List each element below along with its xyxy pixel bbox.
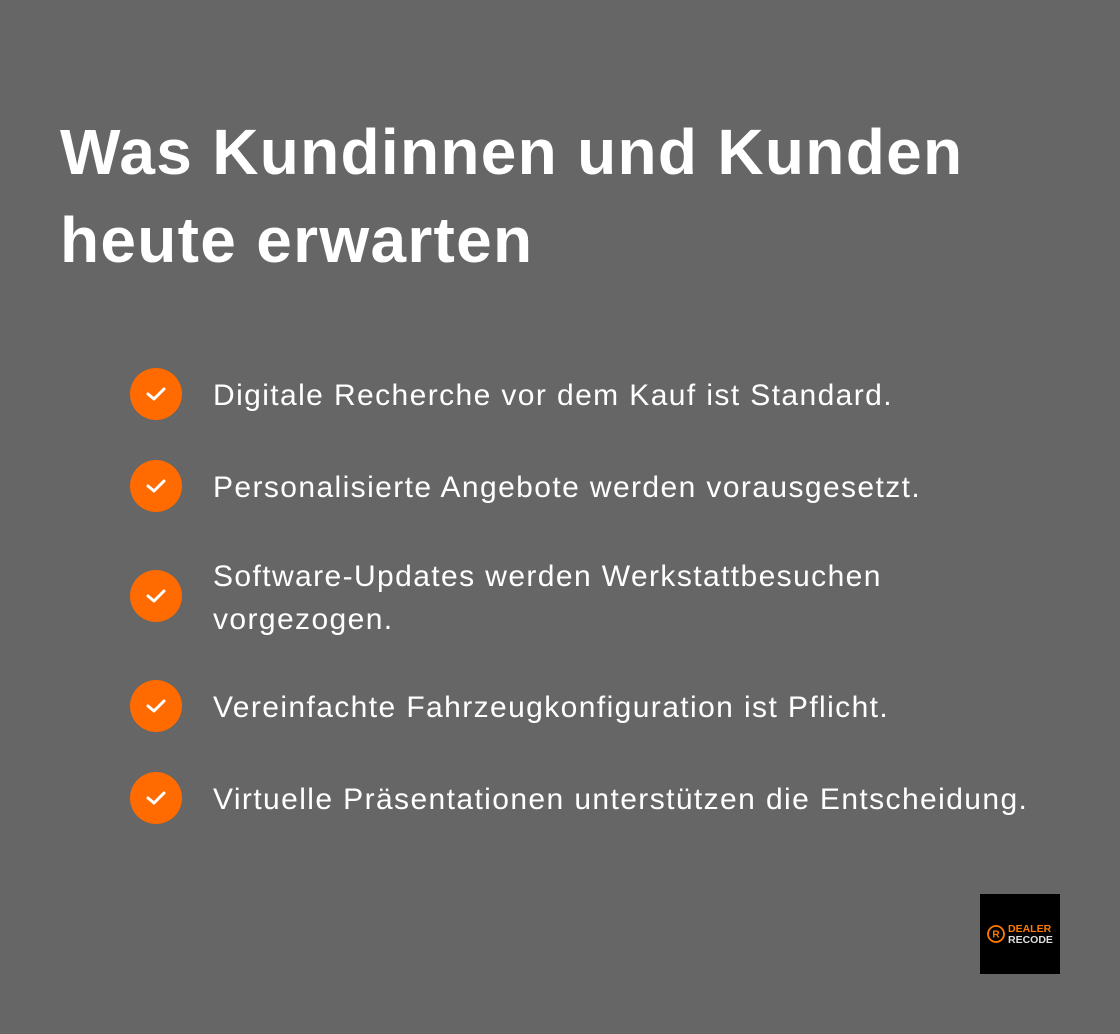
logo: R xyxy=(992,930,1000,940)
text: vorgezogen. xyxy=(213,603,394,636)
item 1 xyxy=(130,368,893,420)
text xyxy=(213,560,882,636)
title xyxy=(60,116,963,276)
item 5 xyxy=(130,772,1028,824)
text: Virtuelle Präsentationen unterstützen die Entscheidung. xyxy=(213,783,1028,816)
item 3 xyxy=(130,560,882,636)
icon: check xyxy=(130,460,182,512)
text: Personalisierte Angebote werden vorausgesetzt. xyxy=(213,471,921,504)
title: Was Kundinnen und Kunden xyxy=(60,116,963,188)
title: heute erwarten xyxy=(60,204,533,276)
icon: check xyxy=(130,772,182,824)
icon: check xyxy=(130,680,182,732)
icon: check xyxy=(130,570,182,622)
text: Digitale Recherche vor dem Kauf ist Standard. xyxy=(213,379,893,412)
item 2 xyxy=(130,460,921,512)
logo: DEALER xyxy=(1008,923,1052,935)
logo xyxy=(980,894,1060,974)
text: Vereinfachte Fahrzeugkonfiguration ist Pflicht. xyxy=(213,691,889,724)
item 4 xyxy=(130,680,889,732)
logo: RECODE xyxy=(1008,934,1053,946)
text: Software-Updates werden Werkstattbesuchen xyxy=(213,560,882,593)
icon: check xyxy=(130,368,182,420)
